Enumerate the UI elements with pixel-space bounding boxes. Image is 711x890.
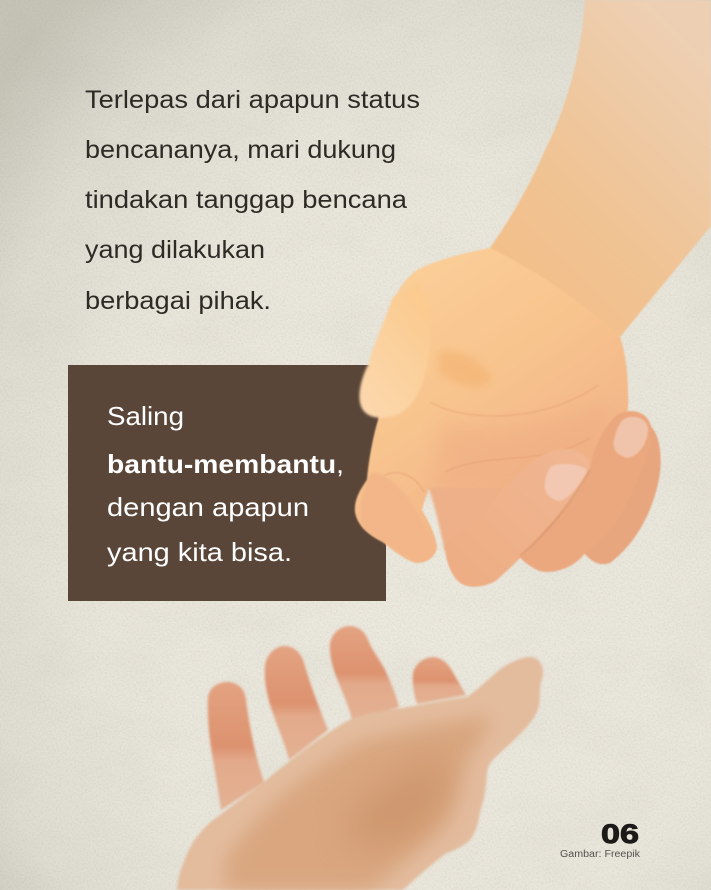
fingernail middle <box>614 417 648 458</box>
callout text <box>107 401 344 567</box>
heading text block: tindakan tanggap bencana <box>85 186 407 214</box>
ring finger <box>583 424 661 564</box>
forearm <box>490 0 711 337</box>
palm deep shadow <box>350 755 450 845</box>
image credit: Gambar: Freepik <box>560 849 641 860</box>
lower blurred hand <box>177 626 543 890</box>
finger 1 <box>208 682 264 810</box>
palm warm hollow <box>438 350 492 387</box>
heading text block: yang dilakukan <box>85 236 265 264</box>
palm <box>355 248 628 563</box>
palm shading <box>225 715 490 890</box>
finger 2 <box>265 646 328 760</box>
finger 4 <box>413 657 466 704</box>
lower thumb shading <box>360 472 434 560</box>
heading text block: bencananya, mari dukung <box>85 136 396 164</box>
palm crease lines <box>378 385 598 492</box>
callout text: bantu-membantu , <box>107 449 344 479</box>
dark brown callout box <box>68 365 386 601</box>
fingernail index <box>545 464 587 501</box>
callout text: dengan apapun <box>107 492 309 522</box>
thumb <box>359 285 430 418</box>
heading text block: berbagai pihak. <box>85 287 271 315</box>
heading text block <box>85 86 420 315</box>
palm lower shading <box>430 400 610 500</box>
page number: 06 <box>601 819 639 849</box>
finger base behind thumb <box>429 488 505 552</box>
middle finger <box>515 411 651 572</box>
index finger <box>445 449 590 587</box>
upper reaching hand <box>355 0 711 587</box>
finger separation shadow <box>520 470 590 556</box>
callout text: yang kita bisa. <box>107 537 292 567</box>
palm <box>177 657 543 890</box>
finger 3 <box>330 626 399 720</box>
heading text block: Terlepas dari apapun status <box>85 86 420 114</box>
callout text: Saling <box>107 401 184 431</box>
